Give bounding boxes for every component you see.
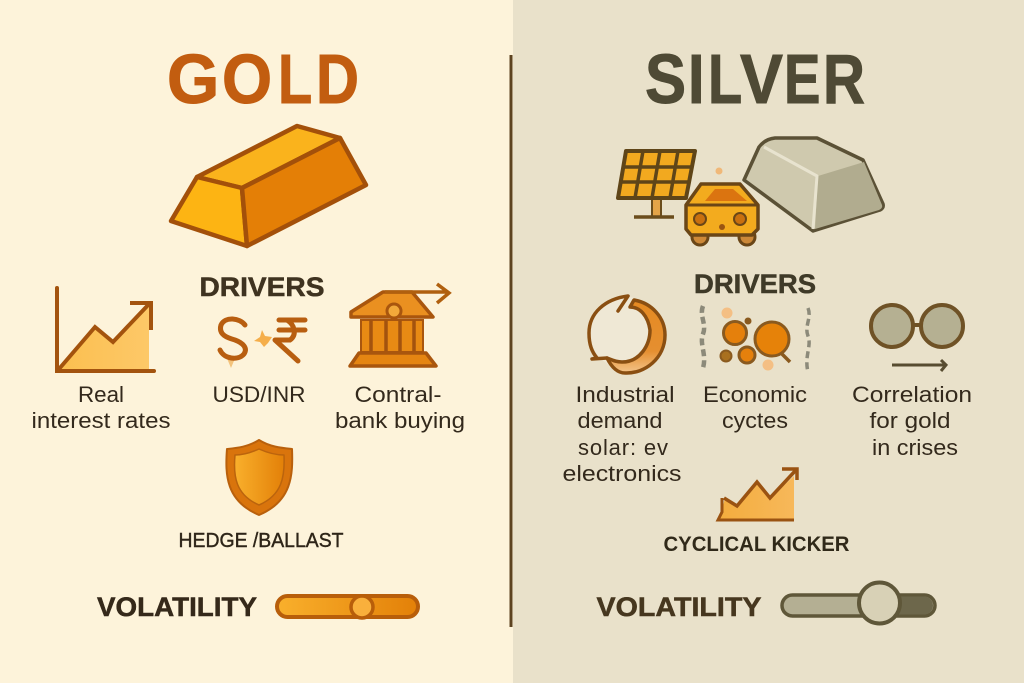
label: economic cycles: Economic bbox=[703, 382, 807, 407]
icon: central bank with arrow bbox=[350, 284, 449, 366]
title: SILVER bbox=[645, 39, 865, 119]
label: silver volatility: VOLATILITY bbox=[596, 592, 762, 622]
title: SILVER: V bbox=[740, 41, 783, 119]
icon: real interest rates chart bbox=[57, 288, 154, 371]
label: correlation: in crises bbox=[872, 435, 958, 460]
label: real interest rates: Real bbox=[78, 382, 124, 407]
icon: industrial cycle bbox=[589, 296, 665, 373]
label: USD/INR: USD/INR bbox=[212, 382, 306, 407]
panel: gold background bbox=[0, 0, 513, 683]
label: industrial demand: electronics bbox=[562, 461, 682, 486]
label: correlation: for gold bbox=[870, 408, 950, 433]
title: SILVER: L bbox=[708, 41, 742, 118]
heading: silver drivers: DRIVERS bbox=[694, 269, 816, 299]
center divider bbox=[510, 55, 512, 627]
title: GOLD: L bbox=[278, 41, 312, 118]
title: GOLD: O bbox=[222, 41, 272, 119]
panel: silver background bbox=[513, 0, 1024, 683]
title: GOLD bbox=[167, 39, 359, 119]
silver volatility slider bbox=[782, 582, 935, 624]
title: SILVER: R bbox=[823, 40, 865, 118]
icon: gold bar bbox=[171, 126, 366, 246]
title: SILVER: E bbox=[784, 41, 820, 119]
label: economic cycles: cyctes bbox=[722, 408, 788, 433]
icon: cyclical chart bbox=[718, 469, 797, 520]
icon: car bbox=[686, 168, 758, 245]
label: hedge ballast: HEDGE /BALLAST bbox=[178, 530, 344, 552]
label: gold volatility: VOLATILITY bbox=[97, 592, 257, 622]
icon: shield bbox=[226, 440, 292, 515]
label: industrial demand: Industrial bbox=[576, 382, 674, 407]
title: SILVER: S bbox=[645, 39, 686, 118]
label: industrial demand: solar: ev bbox=[578, 435, 668, 460]
icon: silver bar bbox=[744, 138, 883, 231]
icon: economic cycles bbox=[702, 306, 809, 372]
label: real interest rates: interest rates bbox=[32, 408, 170, 433]
heading: gold drivers: DRIVERS bbox=[200, 272, 324, 302]
label: central bank buying: bank buying bbox=[335, 408, 465, 433]
icon group: solar panel, car, silver bar bbox=[618, 138, 883, 245]
label: industrial demand: demand bbox=[578, 408, 662, 433]
title: GOLD: D bbox=[316, 39, 359, 118]
icon: dollar and rupee bbox=[220, 319, 305, 368]
gold volatility slider bbox=[277, 596, 418, 618]
label: cyclical kicker: CYCLICAL KICKER bbox=[664, 533, 850, 556]
title: GOLD: G bbox=[167, 40, 219, 118]
title: SILVER: I bbox=[688, 39, 705, 118]
icon: correlation glasses bbox=[871, 305, 963, 371]
label: correlation: Correlation bbox=[852, 382, 972, 407]
label: central bank buying: Contral- bbox=[354, 382, 442, 407]
icon: solar panel bbox=[618, 151, 695, 217]
